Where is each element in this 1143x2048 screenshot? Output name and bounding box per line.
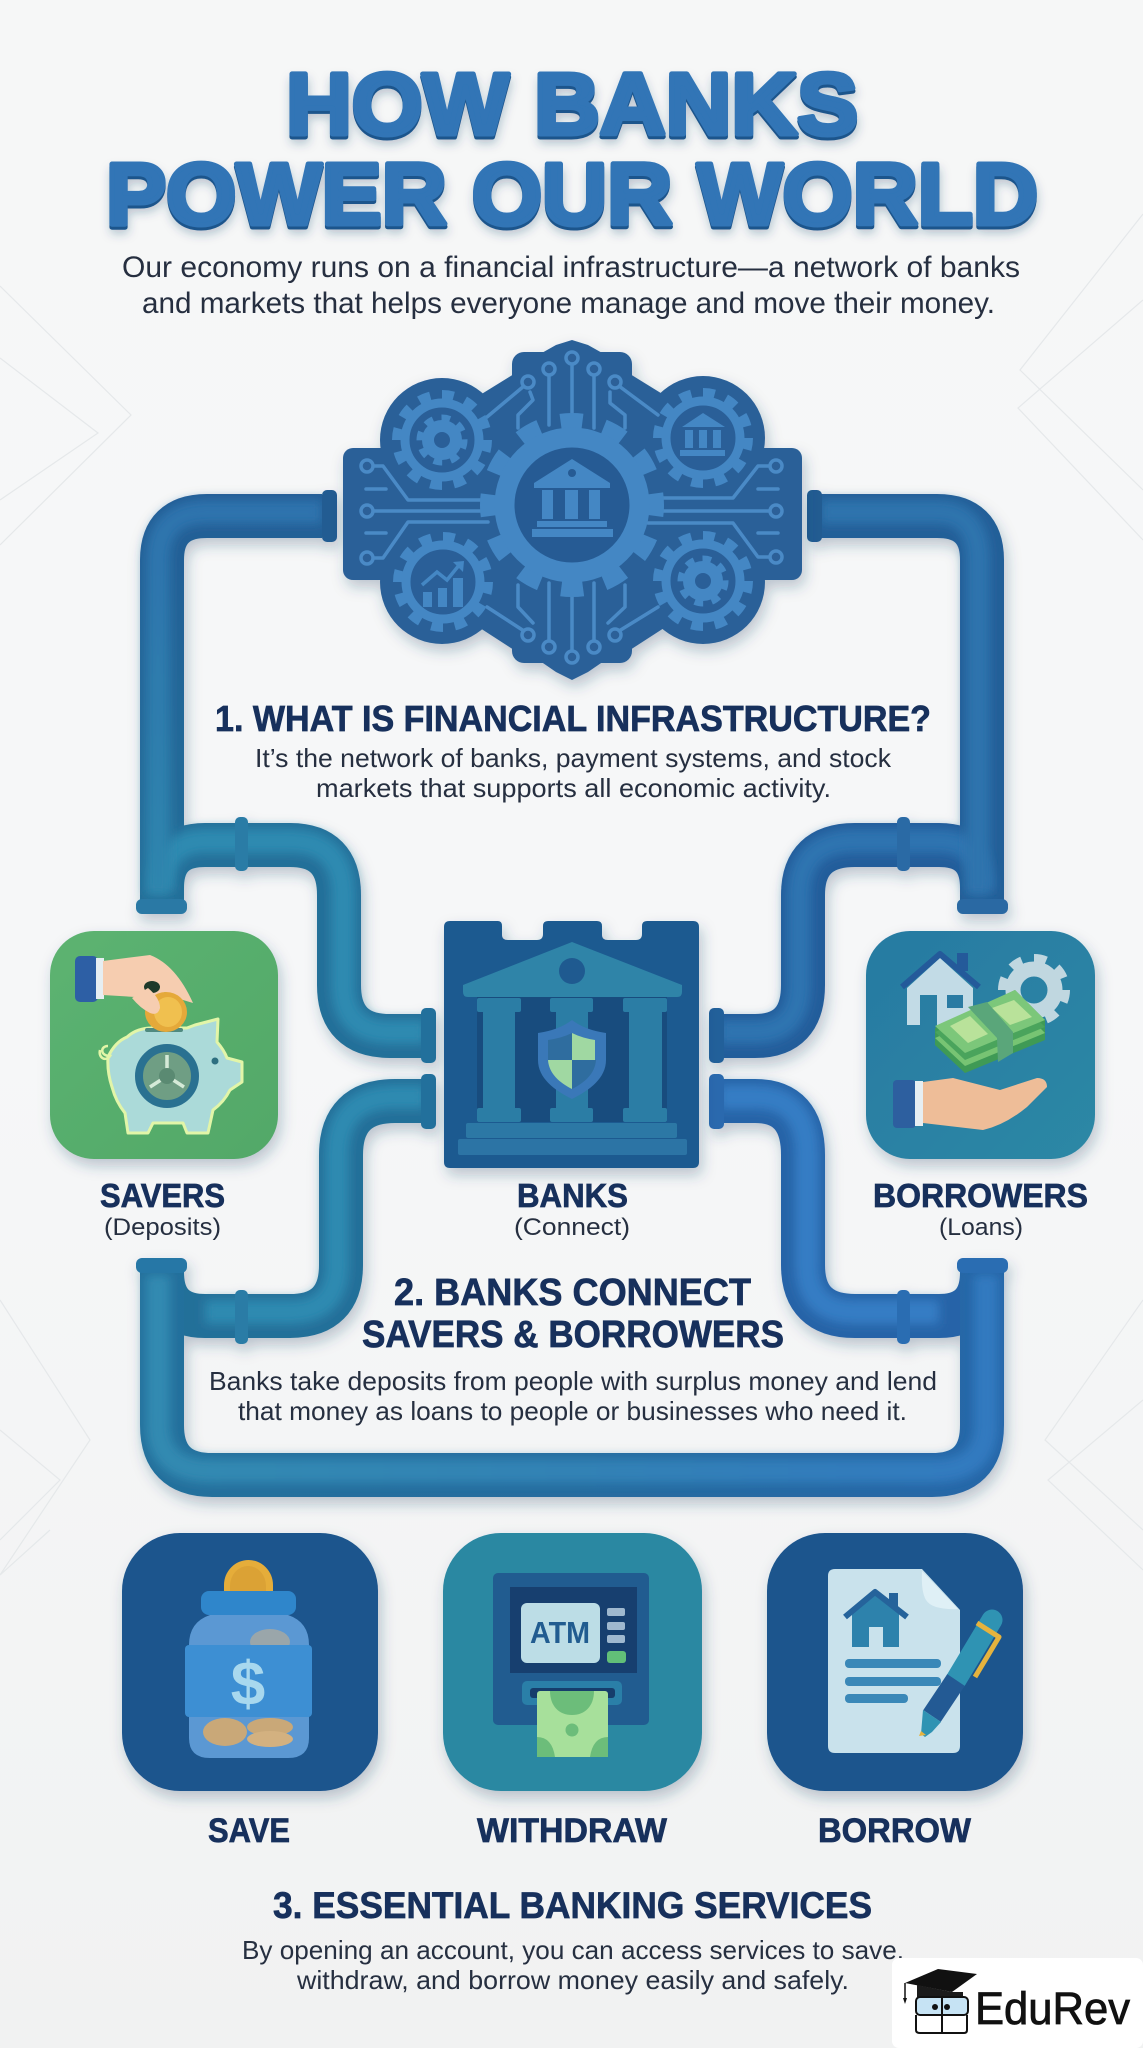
- text: section 1 description: [255, 743, 892, 803]
- icon: hand with coin: [75, 955, 193, 1032]
- text: section 3 description: By opening an account, you can access services to save.: [242, 1935, 904, 1965]
- title: POWER OUR WORLD: [106, 146, 1038, 243]
- intro text: Our economy runs on a financial infrastructure—a network of banks: [122, 251, 1020, 284]
- intro text: [122, 251, 1020, 320]
- icon: piggy bank: [100, 1019, 242, 1133]
- icon: open hand: [893, 1078, 1047, 1130]
- logo: EduRev: EduRev: [975, 1983, 1130, 2034]
- intro text: and markets that helps everyone manage and move their money.: [142, 287, 995, 320]
- panel: withdraw card: [443, 1533, 702, 1791]
- icon: financial infrastructure hub: [343, 340, 802, 680]
- title: [106, 56, 1038, 243]
- icon: loan document: [828, 1569, 960, 1753]
- text: section 1 description: It’s the network of banks, payment systems, and stock: [255, 743, 892, 773]
- panel: banks building: [444, 921, 699, 1168]
- icon: ATM machine: [493, 1573, 649, 1757]
- icon: gear: [1003, 959, 1065, 1021]
- label: save: SAVE: [208, 1812, 290, 1850]
- label: borrowers: BORROWERS: [873, 1177, 1088, 1214]
- label: banks: [514, 1177, 630, 1241]
- text: section 3 description: [242, 1935, 904, 1995]
- label: borrowers: [873, 1177, 1088, 1241]
- pipe: upper left from hub to savers and banks: [136, 490, 436, 1063]
- panel: borrow card: [767, 1533, 1023, 1791]
- gear: top right bank: [658, 393, 748, 483]
- hub plate: [343, 340, 802, 680]
- icon: house: [902, 953, 979, 1025]
- heading: section 2: [362, 1272, 784, 1356]
- panel: savers card: [50, 931, 278, 1159]
- label: banks: BANKS: [517, 1177, 628, 1214]
- heading: section 2: SAVERS & BORROWERS: [362, 1314, 784, 1356]
- label: savers: SAVERS: [100, 1177, 225, 1214]
- icon: banknote: [537, 1691, 608, 1757]
- icon: ATM machine: ATM: [530, 1615, 590, 1650]
- text: section 2 description: that money as loans to people or businesses who need it.: [238, 1396, 907, 1426]
- label: banks: (Connect): [514, 1214, 630, 1241]
- icon: savings jar: [185, 1560, 312, 1758]
- panel: borrowers card: [866, 931, 1095, 1159]
- icon: bank temple: [458, 942, 687, 1155]
- icon: graduate mascot: [903, 1969, 977, 2033]
- gear: bottom left chart: [398, 537, 488, 627]
- panel: save card: [122, 1533, 378, 1791]
- label: savers: [100, 1177, 225, 1241]
- text: section 2 description: Banks take deposits from people with surplus money and lend: [209, 1366, 937, 1396]
- heading: section 1: 1. WHAT IS FINANCIAL INFRASTRUCTURE?: [215, 698, 931, 739]
- icon: shield: [538, 1020, 606, 1099]
- gear: top left cog: [397, 395, 487, 485]
- logo: EduRev: [892, 1958, 1143, 2048]
- icon: money stack: [935, 990, 1045, 1073]
- text: section 3 description: withdraw, and borrow money easily and safely.: [296, 1965, 849, 1995]
- heading: section 2: 2. BANKS CONNECT: [394, 1272, 751, 1314]
- main gear with bank: [488, 421, 656, 589]
- text: section 2 description: [209, 1366, 937, 1426]
- title: HOW BANKS: [286, 56, 858, 153]
- pipe: bottom loop with lower branches to banks: [136, 1074, 1008, 1475]
- pipe: upper right from hub to borrowers and banks: [709, 490, 1008, 1063]
- label: savers: (Deposits): [104, 1214, 221, 1241]
- icon: pen: [919, 1620, 999, 1737]
- text: section 1 description: markets that supports all economic activity.: [316, 773, 831, 803]
- heading: section 3: 3. ESSENTIAL BANKING SERVICES: [273, 1885, 872, 1926]
- label: borrowers: (Loans): [939, 1214, 1023, 1241]
- label: borrow: BORROW: [818, 1812, 972, 1850]
- label: withdraw: WITHDRAW: [477, 1812, 668, 1850]
- gear: bottom right cog: [658, 536, 748, 626]
- icon: savings jar: $: [231, 1650, 265, 1719]
